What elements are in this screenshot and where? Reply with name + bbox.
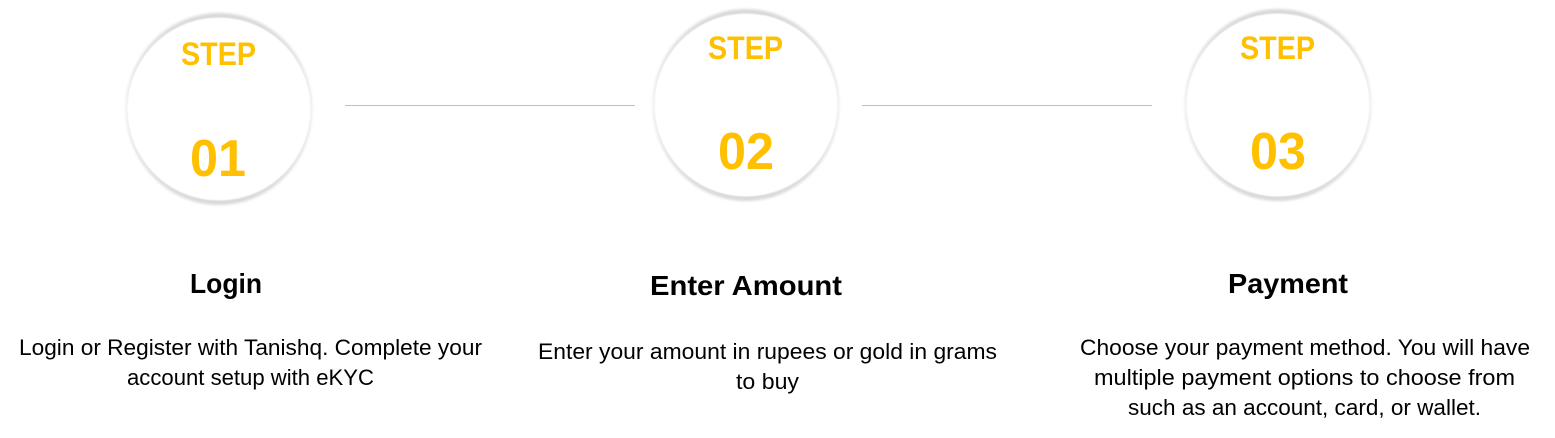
step 3 label: STEP xyxy=(1240,30,1315,66)
text block: Enter Amount description xyxy=(538,339,997,394)
step 1 label: STEP xyxy=(181,36,256,72)
step 2 number: 02 xyxy=(718,123,774,181)
text block: Payment description: multiple payment options to choose from xyxy=(1094,365,1515,390)
step 1 circle badge xyxy=(126,13,312,205)
step 3 number: 03 xyxy=(1250,123,1306,181)
heading: Enter Amount: Enter Amount xyxy=(650,270,842,301)
text block: Payment description: such as an account, card, or wallet. xyxy=(1128,395,1481,420)
step 1 number: 01 xyxy=(190,130,246,188)
connector line 2 xyxy=(862,104,1152,106)
text block: Enter Amount description: to buy xyxy=(736,369,799,394)
step 3 circle badge xyxy=(1184,9,1372,201)
step 2 circle badge xyxy=(652,9,840,201)
step 2 label: STEP xyxy=(708,30,783,66)
text block: Login description: Login or Register with Tanishq. Complete your xyxy=(19,335,482,360)
text block: Payment description: Choose your payment method. You will have xyxy=(1080,335,1530,360)
connector line 1 xyxy=(345,104,635,106)
heading: Payment: Payment xyxy=(1228,268,1348,299)
text block: Login description: account setup with eKYC xyxy=(127,365,374,390)
text block: Payment description xyxy=(1080,335,1530,420)
text block: Login description xyxy=(19,335,482,390)
text block: Enter Amount description: Enter your amount in rupees or gold in grams xyxy=(538,339,997,364)
heading: Login: Login xyxy=(190,268,262,299)
